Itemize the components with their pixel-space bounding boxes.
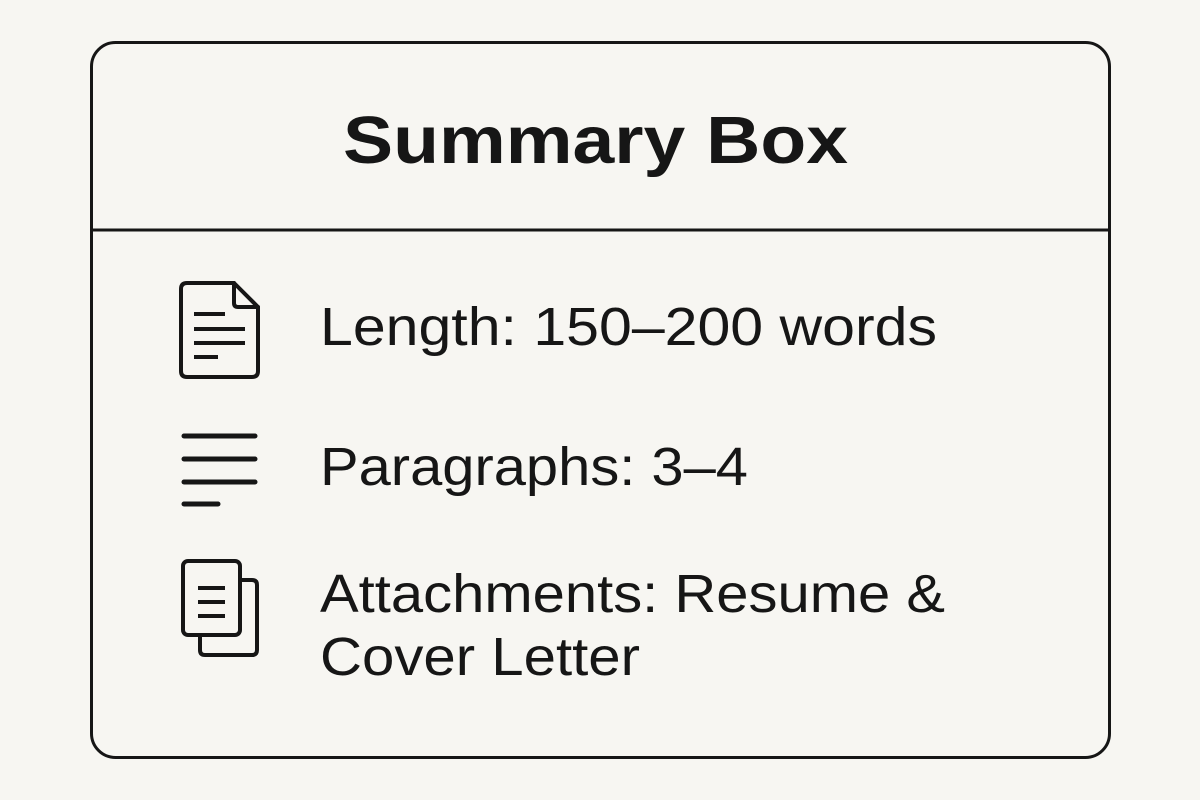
- icon: paragraph lines: [184, 436, 255, 504]
- title: Summary Box: [343, 103, 848, 178]
- text: attachments: Cover Letter: [320, 627, 640, 687]
- text: attachments: [320, 564, 945, 687]
- icon: attachments: [183, 561, 257, 655]
- panel: summary box: [91, 42, 1110, 758]
- icon: document: [181, 283, 258, 377]
- text: attachments: Attachments: Resume &: [320, 564, 945, 624]
- text: paragraphs: Paragraphs: 3–4: [320, 437, 748, 497]
- text: length: Length: 150–200 words: [320, 297, 937, 357]
